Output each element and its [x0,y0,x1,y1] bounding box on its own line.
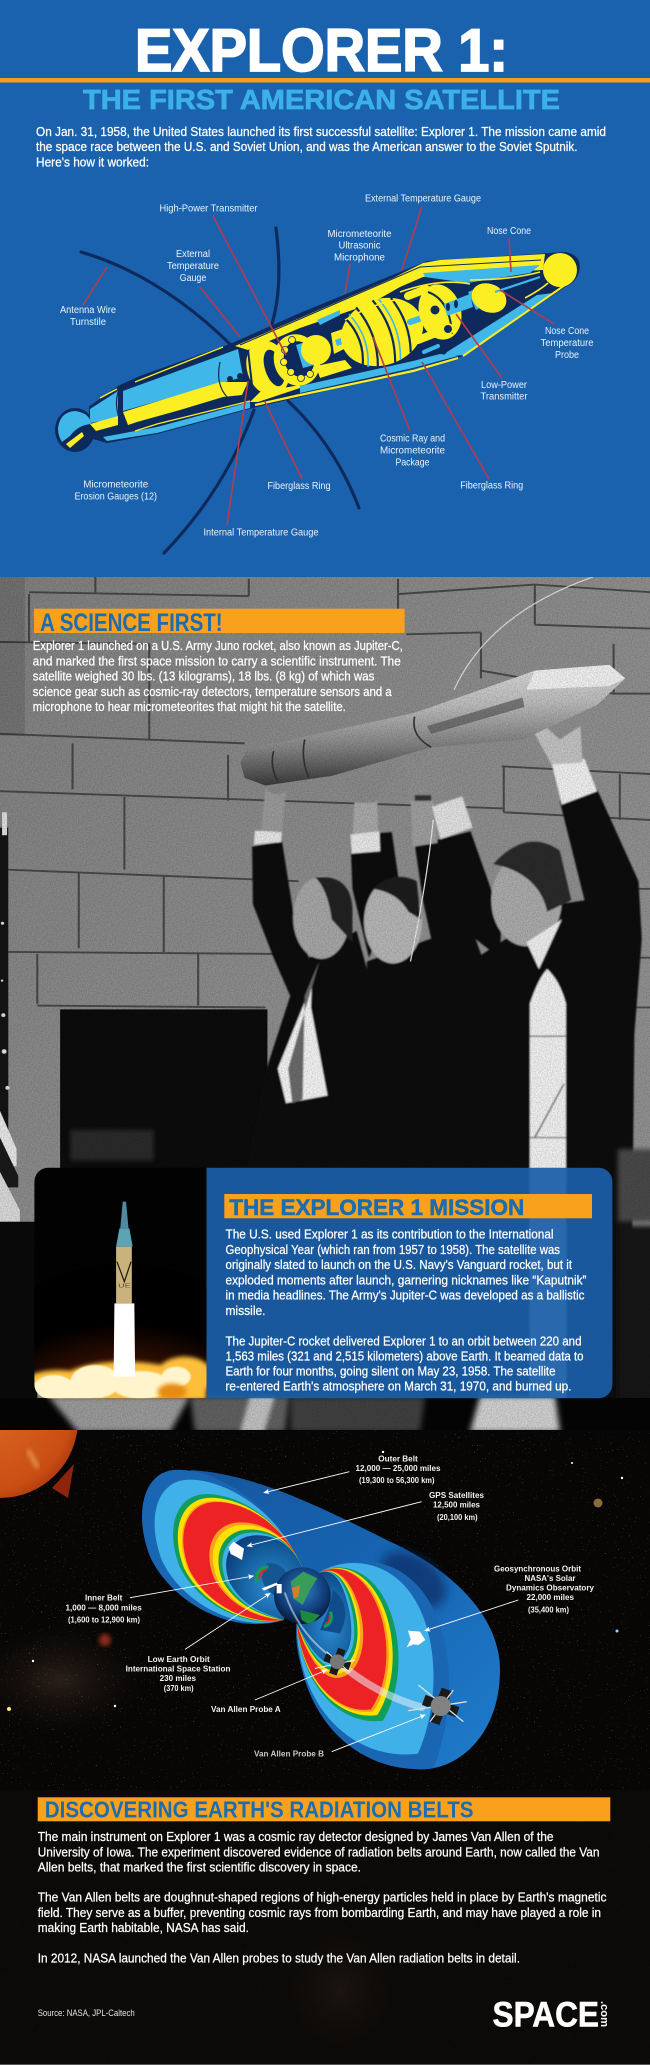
orange divider rule [0,78,650,82]
mission text: 1,563 miles (321 and 2,515 kilometers) above Earth. It beamed data to [226,1348,584,1363]
callout labels: Micrometeorite [328,229,392,240]
photo: rocket launch: UE [118,1284,131,1289]
callout labels: Nose Cone [545,326,589,337]
callout labels: Microphone [334,252,385,264]
belt diagram labels: Inner Belt [85,1594,123,1603]
belt diagram labels: Van Allen Probe B [254,1750,324,1759]
icon: sun [0,1430,78,1498]
panel: The Explorer 1 Mission [34,1168,612,1398]
left man [251,841,368,1393]
mission text: The Jupiter-C rocket delivered Explorer 1 to an orbit between 220 and [226,1333,582,1348]
belt diagram labels: 12,000 — 25,000 miles [356,1464,441,1473]
mission text: missile. [226,1303,266,1318]
antenna wires [81,228,359,553]
intro text: Here's how it worked: [36,154,149,170]
mission text: exploded moments after launch, garnering nicknames like “Kaputnik” [226,1272,586,1287]
antenna wire arc [454,577,593,690]
mission text: re-entered Earth's atmosphere on March 31, 1970, and burned up. [226,1379,572,1394]
subtitle: THE FIRST AMERICAN SATELLITE [83,84,560,115]
callout labels: External [176,249,210,260]
belt diagram labels: 22,000 miles [526,1593,575,1602]
icon: International Space Station [262,1583,282,1593]
callout labels: Micrometeorite [380,446,445,456]
text block: radiation belts: University of Iowa. The experiment discovered evidence of radiation belts around Earth, now called the Van [38,1844,599,1859]
callout labels: Probe [555,350,579,361]
text block: A Science First: Explorer 1 launched on a U.S. Army Juno rocket, also known as Jupiter-C, [33,638,403,653]
callout labels: Low-Power [481,380,528,391]
heading: A Science First: A SCIENCE FIRST! [40,609,223,637]
darker wall corner [0,575,25,736]
callout labels: Internal Temperature Gauge [204,528,319,539]
belt diagram labels: Dynamics Observatory [506,1583,595,1592]
belt diagram labels: Van Allen Probe A [211,1705,281,1714]
text block: radiation belts: Allen belts, that marked the first scientific discovery in space. [38,1859,361,1874]
text block: A Science First: microphone to hear micrometeorites that might hit the satellite. [33,699,346,714]
right gutter fragments [618,1149,650,1432]
probe orbit path [285,1593,422,1707]
small inner belt lobes [256,1563,345,1633]
radiation belts diagram [130,1470,518,1769]
blue text card [206,1168,612,1398]
mission text: Earth for four months, going silent on May 23, 1958. The satellite [226,1364,556,1379]
mission text: The U.S. used Explorer 1 as its contribution to the International [226,1227,554,1242]
callout labels: Turnstile [70,317,106,328]
text block: A Science First: satellite weighed 30 lbs. (13 kilograms), 18 lbs. (8 kg) of which was [33,669,375,684]
belt diagram labels: (35,400 km) [528,1606,569,1615]
callout labels: Gauge [180,273,207,284]
middle man [350,832,399,958]
panel: space background [0,1430,650,2065]
flag [0,812,37,1436]
callout labels: Temperature [167,261,219,272]
text block: A Science First: and marked the first space mission to carry a scientific instrument. The [33,653,401,668]
lower belt lobe [297,1561,449,1769]
text block: A Science First: science gear such as cosmic-ray detectors, temperature sensors and a [33,684,392,699]
text block: radiation belts: In 2012, NASA launched the Van Allen probes to study the Van Allen radiation belts in detail. [38,1951,520,1966]
callout labels: External Temperature Gauge [365,194,481,205]
belt diagram labels: (19,300 to 56,300 km) [359,1476,435,1485]
text block: radiation belts: The main instrument on Explorer 1 was a cosmic ray detector designed by James Van Allen of the [38,1829,553,1844]
heading: Discovering Earth's Radiation Belts: DISCOVERING EARTH'S RADIATION BELTS [45,1796,474,1822]
heading: A Science First [34,609,405,637]
mission text: Geophysical Year (which ran from 1957 to 1958). The satellite was [226,1242,560,1257]
callout labels: Erosion Gauges (12) [74,491,157,502]
callout labels: Micrometeorite [83,480,149,491]
photo: rocket launch [34,1168,206,1398]
title: EXPLORER 1: [135,17,508,84]
intro text: the space race between the U.S. and Soviet Union, and was the American answer to the Soviet Sputnik. [36,139,578,154]
callout labels: Fiberglass Ring [460,481,523,492]
text block: radiation belts: making Earth habitable, NASA has said. [38,1920,249,1935]
callout labels: Package [396,457,430,468]
upper belt lobe [142,1470,302,1624]
belt diagram labels: International Space Station [126,1665,231,1674]
callout labels: Ultrasonic [338,241,380,252]
belt diagram labels: Low Earth Orbit [148,1655,210,1664]
belt diagram labels: (1,600 to 12,900 km) [68,1616,140,1625]
callout labels: Nose Cone [487,226,531,237]
mission text [226,1227,586,1394]
belt diagram labels: Geosynchronous Orbit [494,1564,581,1573]
callout labels: Antenna Wire [60,305,116,316]
belt diagram labels [66,1455,595,1759]
belt diagram labels: (20,100 km) [437,1513,478,1522]
panel: blue header background [0,0,650,577]
right man [439,831,502,958]
text block: radiation belts: field. They serve as a buffer, preventing cosmic rays from bombarding Earth, and may have played a role in [38,1905,601,1920]
outer shell [190,1470,500,1769]
fireplace [60,1009,268,1368]
icon: Solar Dynamics Observatory [407,1631,425,1647]
satellite body [55,253,579,452]
source credit: Source: NASA, JPL-Caltech [38,2008,135,2018]
text block: A Science First [33,638,403,714]
belt diagram labels: 12,500 miles [433,1501,481,1510]
brick wall mortar [0,577,650,1007]
belt diagram labels: GPS Satellites [429,1491,485,1500]
lower photo fragments [37,1396,650,1430]
icon: Van Allen Probe A [315,1645,355,1679]
photo: team holding up the Explorer 1 model [0,575,650,1436]
icon: GPS satellite [229,1542,244,1560]
logo: Space.com: SPACE [492,1996,599,2035]
callout labels: Fiberglass Ring [268,481,330,492]
white rocket model [530,969,566,1432]
belt diagram labels: (370 km) [164,1684,194,1693]
icon: Van Allen Probe B [408,1683,467,1729]
callout lines [83,206,554,525]
film grain [0,577,650,1430]
belt diagram labels: Outer Belt [378,1455,418,1464]
callout labels: Temperature [540,338,594,349]
mission text: originally slated to launch on the U.S. Navy's Vanguard rocket, but it [226,1257,572,1272]
satellite cutaway diagram [55,194,594,553]
arrows [130,1472,518,1752]
satellite model [240,665,625,785]
belt diagram labels: NASA's Solar [524,1574,576,1583]
callout labels: Transmitter [480,392,528,402]
intro text [36,124,606,170]
belt diagram labels: 230 miles [160,1674,197,1683]
text block: radiation belts [38,1829,607,1966]
icon: Earth [274,1567,331,1625]
heading bar: THE EXPLORER 1 MISSION [229,1195,524,1220]
callout labels [60,194,594,539]
callout labels: Cosmic Ray and [380,434,445,445]
belt diagram labels: 1,000 — 8,000 miles [66,1603,142,1612]
mission text: in media headlines. The Army's Jupiter-C was developed as a ballistic [226,1288,585,1303]
logo: Space.com: .com [598,2001,610,2027]
callout labels: High-Power Transmitter [160,204,258,215]
